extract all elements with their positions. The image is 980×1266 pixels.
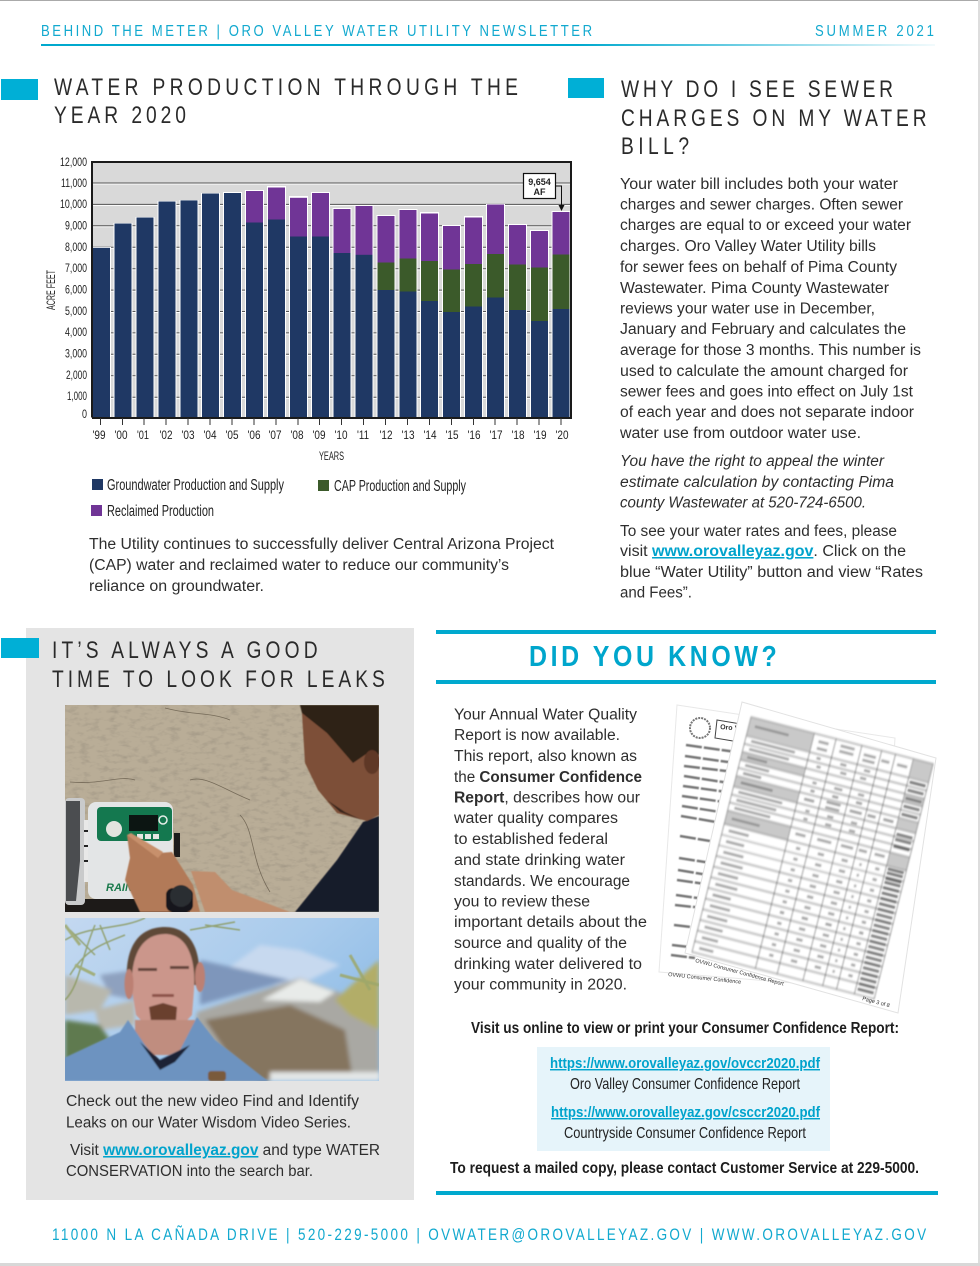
y axis labels xyxy=(60,157,87,421)
report document pages xyxy=(659,702,936,1013)
heading: sewer charges: BILL? xyxy=(621,132,689,160)
y axis labels: 6,000 xyxy=(65,284,87,296)
bar chart: water production by year xyxy=(46,157,571,463)
callout: 9,654 AF xyxy=(524,174,564,211)
online report prompt: Visit us online to view or print your Consumer Confidence Report: xyxy=(471,1020,899,1037)
rates and fees text: and Fees”. xyxy=(620,584,692,602)
photo: man at irrigation controller: RAIN xyxy=(106,882,134,894)
x axis labels: '02 xyxy=(160,430,172,442)
heading: did you know: DID YOU KNOW? xyxy=(529,640,777,672)
chart legend: Groundwater Production and Supply xyxy=(107,477,284,494)
panel: did you know xyxy=(436,630,938,1195)
water quality report text: Report, describes how our xyxy=(454,790,640,806)
y axis labels: 7,000 xyxy=(65,263,87,275)
x axis labels: '18 xyxy=(512,430,524,442)
sewer charges body text: charges. Oro Valley Water Utility bills xyxy=(620,238,876,255)
water quality report text: This report, also known as xyxy=(454,748,637,765)
sewer charges body text: Your water bill includes both your water xyxy=(620,176,898,193)
x axis labels: '04 xyxy=(204,430,217,442)
link box: Countryside Consumer Confidence Report xyxy=(564,1125,806,1142)
water quality report text: and state drinking water xyxy=(454,852,625,869)
heading: leaks: IT’S ALWAYS A GOOD xyxy=(52,636,318,664)
x axis labels: '08 xyxy=(290,430,304,442)
y axis labels: 4,000 xyxy=(65,327,87,339)
leaks text: Leaks on our Water Wisdom Video Series. xyxy=(66,1114,351,1132)
rates and fees text: visit www.orovalleyaz.gov . Click on the xyxy=(620,543,906,560)
heading: leaks xyxy=(52,636,385,693)
water quality report text: your community in 2020. xyxy=(454,976,627,994)
y axis labels: 10,000 xyxy=(60,199,87,211)
section marker: leaks xyxy=(1,638,39,658)
link box: Oro Valley Consumer Confidence Report xyxy=(570,1076,800,1093)
reclaimed production bars xyxy=(246,188,570,270)
sewer charges body text: charges are equal to or exceed your water xyxy=(620,217,911,234)
newsletter header xyxy=(41,23,935,46)
y axis labels: 12,000 xyxy=(60,157,87,169)
sewer charges body text: for sewer fees on behalf of Pima County xyxy=(620,259,897,276)
y axis labels: 0 xyxy=(82,409,87,421)
x axis labels: '11 xyxy=(357,430,369,442)
heading: sewer charges: CHARGES ON MY WATER xyxy=(621,104,927,132)
issue date: SUMMER 2021 xyxy=(815,23,934,40)
appeal note: You have the right to appeal the winter xyxy=(620,453,885,470)
x axis ticks xyxy=(100,418,561,425)
water quality report text: the Consumer Confidence xyxy=(454,769,642,786)
leaks text: Visit www.orovalleyaz.gov and type WATER xyxy=(70,1142,380,1159)
water quality report text: Report is now available. xyxy=(454,727,620,744)
mailed copy request: To request a mailed copy, please contact Customer Service at 229-5000. xyxy=(450,1160,919,1177)
appeal note: estimate calculation by contacting Pima xyxy=(620,474,894,491)
x axis labels: '00 xyxy=(114,430,128,442)
callout: 9,654 AF: 9,654 xyxy=(528,177,551,187)
x axis labels: '16 xyxy=(468,430,480,442)
link box xyxy=(537,1047,830,1151)
appeal note: county Wastewater at 520-724-6500. xyxy=(620,494,866,512)
x axis labels: '19 xyxy=(534,430,546,442)
x axis labels: '10 xyxy=(334,430,348,442)
y axis title: ACRE FEET xyxy=(46,270,58,310)
y axis labels: 8,000 xyxy=(65,242,87,254)
leaks text xyxy=(66,1093,380,1180)
water quality report text: to established federal xyxy=(454,831,608,848)
y axis labels: 11,000 xyxy=(61,178,87,190)
rates and fees text: To see your water rates and fees, please xyxy=(620,523,897,540)
chart legend xyxy=(91,477,466,520)
x axis title: YEARS xyxy=(319,451,344,463)
y axis labels: 2,000 xyxy=(66,370,87,382)
water quality report text: drinking water delivered to xyxy=(454,956,642,973)
leaks text: Check out the new video Find and Identify xyxy=(66,1093,359,1110)
sewer charges body text: of each year and does not separate indoor xyxy=(620,404,914,421)
rates and fees text xyxy=(620,523,923,602)
water quality report text: standards. We encourage xyxy=(454,873,630,890)
photo: utility worker portrait xyxy=(64,918,380,1081)
photo: man at irrigation controller xyxy=(60,705,380,912)
x axis labels: '14 xyxy=(424,430,437,442)
x axis labels: '09 xyxy=(312,430,326,442)
sewer charges body text: average for those 3 months. This number is xyxy=(620,342,921,359)
link box: https://www.orovalleyaz.gov/ovccr2020.pdf xyxy=(550,1056,820,1072)
water quality report text: you to review these xyxy=(454,894,590,910)
sewer charges body text: reviews your water use in December, xyxy=(620,300,875,318)
x axis labels: '06 xyxy=(248,430,260,442)
chart caption: The Utility continues to successfully deliver Central Arizona Project xyxy=(89,536,555,553)
water quality report text xyxy=(453,706,647,994)
panel: leaks xyxy=(1,628,414,1200)
appeal note xyxy=(620,453,894,512)
report document pages: OVWU Consumer Confidence Report xyxy=(694,958,785,988)
chart legend: CAP Production and Supply xyxy=(334,478,466,495)
x axis labels: '12 xyxy=(380,430,392,442)
callout: 9,654 AF: AF xyxy=(534,187,546,197)
water quality report text: water quality compares xyxy=(453,810,618,827)
water quality report text: important details about the xyxy=(454,914,647,931)
heading: water production xyxy=(54,73,518,129)
water quality report text: source and quality of the xyxy=(454,935,627,952)
x axis labels: '03 xyxy=(182,430,194,442)
heading: sewer charges xyxy=(621,75,927,160)
heading: water production: WATER PRODUCTION THROUGH THE xyxy=(54,73,518,101)
heading: sewer charges: WHY DO I SEE SEWER xyxy=(621,75,893,103)
sewer charges body text: Wastewater. Pima County Wastewater xyxy=(620,280,889,297)
white bar halos xyxy=(92,186,570,418)
footer contact line: 11000 N LA CAÑADA DRIVE | 520-229-5000 | OVWATER@OROVALLEYAZ.GOV | WWW.OROVALLEYAZ.GOV xyxy=(52,1226,926,1244)
sewer charges body text: sewer fees and goes into effect on July 1st xyxy=(620,384,914,400)
chart caption: (CAP) water and reclaimed water to reduce our community’s xyxy=(89,557,509,574)
chart frame xyxy=(92,162,571,418)
heading: water production: YEAR 2020 xyxy=(54,101,186,129)
CAP production bars xyxy=(378,254,570,322)
y axis labels: 5,000 xyxy=(65,306,87,318)
water quality report text: Your Annual Water Quality xyxy=(454,706,637,724)
x axis labels: '20 xyxy=(556,430,568,442)
chart legend: Reclaimed Production xyxy=(107,503,214,520)
sewer charges body text: used to calculate the amount charged for xyxy=(620,363,908,380)
rates and fees text: blue “Water Utility” button and view “Rates xyxy=(620,564,923,581)
x axis labels: '05 xyxy=(226,430,238,442)
groundwater production bars xyxy=(93,193,570,418)
sewer charges body text: water use from outdoor water use. xyxy=(619,425,861,442)
y axis labels: 3,000 xyxy=(65,348,87,360)
heading: leaks: TIME TO LOOK FOR LEAKS xyxy=(52,665,385,693)
newsletter title: BEHIND THE METER | ORO VALLEY WATER UTILITY NEWSLETTER xyxy=(41,23,592,40)
x axis labels: '15 xyxy=(446,430,458,442)
x axis labels: '07 xyxy=(268,430,282,442)
back page: Oro Val xyxy=(720,724,745,733)
sewer charges body text: January and February and calculates the xyxy=(620,321,906,338)
x axis labels: '01 xyxy=(137,430,149,442)
x axis labels: '99 xyxy=(92,430,106,442)
x axis labels: '13 xyxy=(402,430,414,442)
leaks text: CONSERVATION into the search bar. xyxy=(66,1163,313,1180)
y axis labels: 1,000 xyxy=(67,391,87,403)
front page xyxy=(685,702,936,1013)
link box: https://www.orovalleyaz.gov/csccr2020.pdf xyxy=(551,1105,820,1121)
section marker: sewer charges xyxy=(568,78,604,98)
sewer charges body text: charges and sewer charges. Often sewer xyxy=(620,196,903,214)
y axis labels: 9,000 xyxy=(65,220,87,232)
x axis labels xyxy=(92,430,568,442)
x axis labels: '17 xyxy=(490,430,502,442)
back page: OVWU Consumer Confidence xyxy=(668,972,741,986)
report document pages: Page 3 of 8 xyxy=(861,996,890,1009)
back page xyxy=(659,705,895,990)
section marker: water production xyxy=(1,79,38,100)
sewer charges body text xyxy=(619,176,921,442)
chart caption xyxy=(89,536,555,595)
chart caption: reliance on groundwater. xyxy=(89,578,264,595)
